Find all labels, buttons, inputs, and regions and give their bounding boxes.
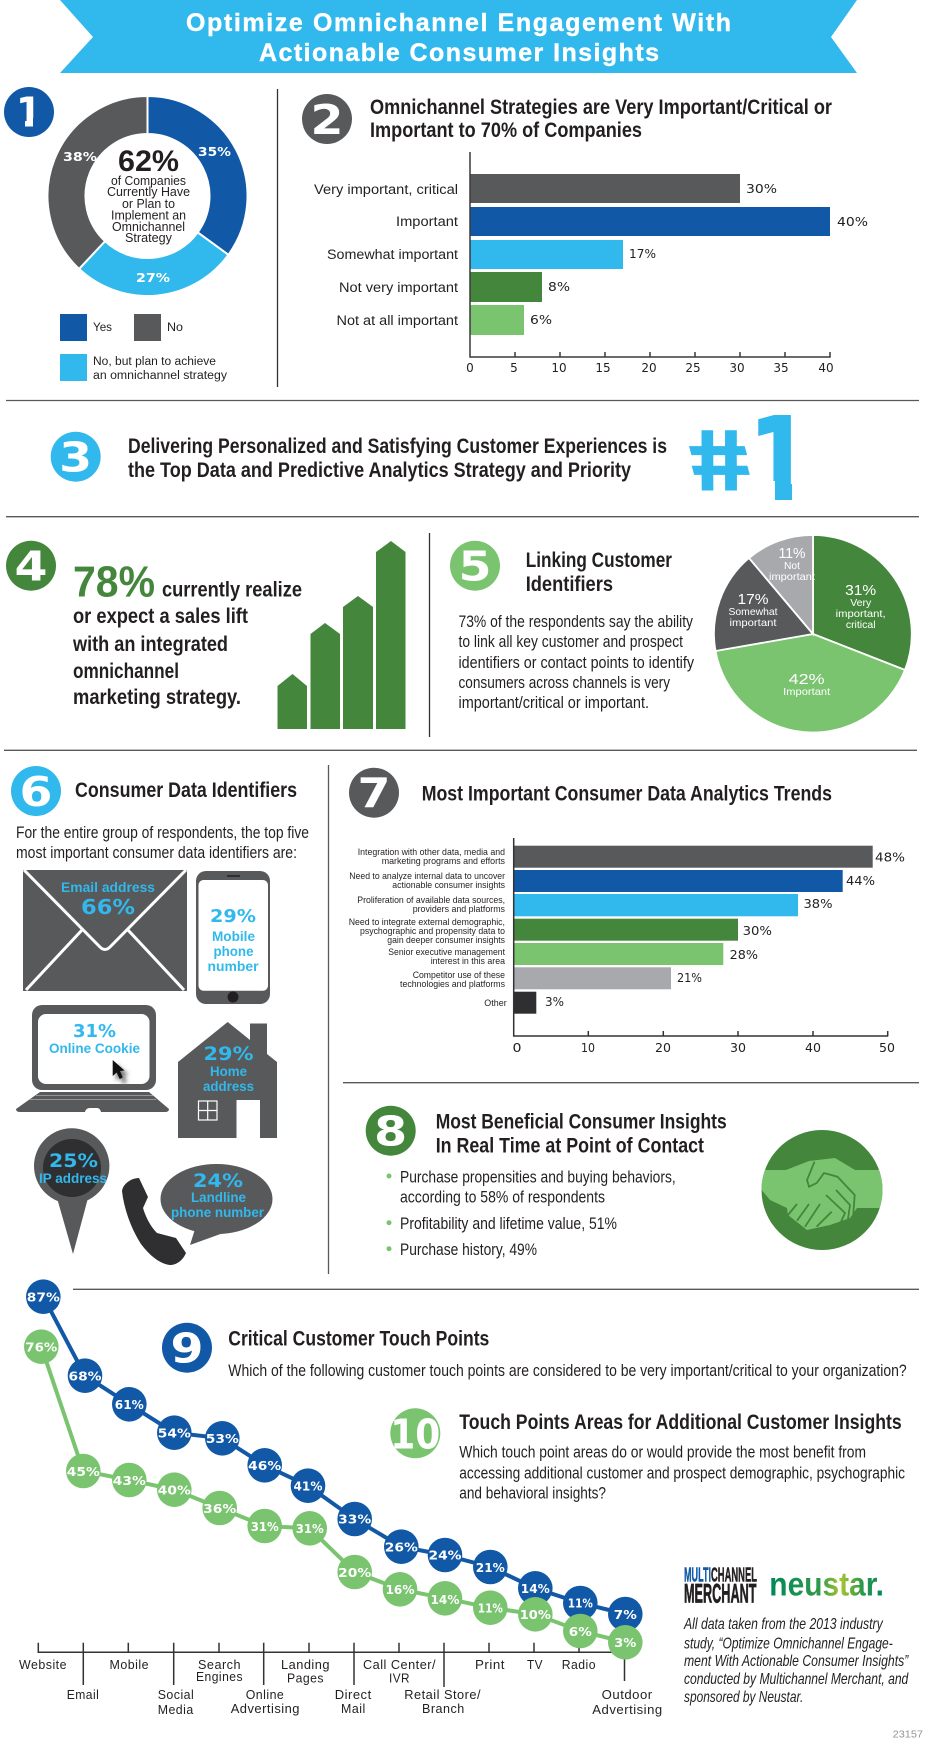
icon: smartphone mobile phone number: Mobile	[212, 929, 255, 944]
pie chart	[714, 535, 912, 733]
category labels: Important	[396, 214, 458, 229]
axis numbers: 10	[581, 1041, 595, 1055]
line chart: very important touch points (blue)	[26, 1279, 643, 1631]
icon: map pin ip address	[34, 1128, 109, 1254]
number badge 5: 5	[458, 542, 492, 590]
heading 6: Consumer Data Identifiers	[75, 778, 297, 802]
value labels: 17%	[629, 247, 656, 261]
value labels: 38%	[804, 897, 832, 911]
icon: laptop online cookie: Online Cookie	[49, 1041, 140, 1056]
category labels: Need to integrate external demographic,	[349, 917, 505, 928]
icon: house home address: Home	[210, 1064, 247, 1079]
category labels: actionable consumer insights	[392, 880, 505, 891]
body text 5: important/critical or important.	[458, 693, 649, 712]
line chart: very important touch points (blue): 54%	[158, 1426, 191, 1440]
number badge 7: 7	[358, 770, 390, 818]
icon: smartphone mobile phone number: 29%	[210, 907, 256, 927]
number badge 4	[6, 541, 56, 591]
number badge 1	[4, 87, 54, 137]
category labels: Competitor use of these	[413, 970, 505, 981]
value labels: 30%	[746, 182, 777, 196]
category labels	[349, 847, 507, 1009]
touch point category labels: TV	[527, 1657, 543, 1672]
logo: Multichannel Merchant	[684, 1565, 757, 1608]
heading 5: Identifiers	[526, 572, 613, 596]
line chart: additional insights touch points (green)	[24, 1329, 643, 1660]
icon: laptop online cookie: 31%	[73, 1021, 116, 1042]
axis numbers: 5	[510, 361, 518, 375]
donut centre text: Strategy	[125, 230, 172, 245]
category labels: technologies and platforms	[400, 979, 505, 990]
heading 5: Linking Customer	[526, 548, 673, 572]
donut legend: an omnichannel strategy	[93, 370, 227, 382]
value labels: 21%	[677, 971, 702, 985]
number badge 1: 1	[16, 88, 42, 136]
category labels: marketing programs and efforts	[382, 856, 505, 867]
title banner	[60, 0, 857, 73]
touch point category labels: Retail Store/	[404, 1687, 481, 1702]
axis numbers: 35	[773, 361, 789, 375]
heading 7: Most Important Consumer Data Analytics Trends	[422, 782, 832, 806]
body text 6	[16, 823, 309, 862]
pie labels: 42%	[789, 671, 825, 688]
touch point category labels: Outdoor	[602, 1687, 653, 1702]
panel 4: sales lift	[6, 541, 406, 729]
icon: house home address: 29%	[204, 1043, 254, 1065]
source note: All data taken from the 2013 industry	[683, 1616, 883, 1633]
donut centre text: Implement an	[111, 208, 186, 222]
bullet list: Purchase propensities and buying behaviors,	[400, 1167, 676, 1186]
line chart: additional insights touch points (green): 14%	[430, 1592, 460, 1607]
body text 6: most important consumer data identifiers are:	[16, 843, 297, 862]
icon: speech bubble landline	[160, 1164, 272, 1245]
category labels: Not very important	[339, 280, 458, 295]
icon: speech bubble landline: 24%	[193, 1170, 243, 1192]
heading 8	[436, 1109, 727, 1158]
line chart: additional insights touch points (green): 31%	[296, 1521, 324, 1536]
icon: envelope email address	[23, 870, 187, 991]
category labels: Proliferation of available data sources,	[357, 895, 505, 906]
number badge 8: 8	[374, 1108, 407, 1156]
line chart: additional insights touch points (green): 31%	[251, 1519, 279, 1534]
bullet list: according to 58% of respondents	[400, 1187, 605, 1206]
big number one: 1	[749, 394, 811, 528]
touch point category labels: Website	[19, 1657, 67, 1672]
donut centre text: Omnichannel	[112, 219, 185, 234]
body text 5: 73% of the respondents say the ability	[458, 612, 693, 631]
heading 2	[370, 95, 833, 142]
donut centre text: or Plan to	[122, 196, 175, 211]
category labels: gain deeper consumer insights	[387, 935, 505, 946]
value labels	[530, 182, 868, 327]
big number one: #	[678, 414, 761, 508]
line chart: very important touch points (blue): 46%	[248, 1458, 282, 1473]
donut legend: No	[167, 322, 183, 334]
body text 5: identifiers or contact points to identify	[458, 653, 694, 672]
panel 8: beneficial consumer insights	[366, 1106, 884, 1259]
value labels: 30%	[743, 924, 772, 938]
panel 10: additional insights heading	[390, 1408, 905, 1502]
panel 6: consumer data identifiers	[11, 766, 309, 1265]
body text 6: For the entire group of respondents, the top five	[16, 823, 309, 842]
line chart: additional insights touch points (green): 40%	[158, 1482, 191, 1498]
donut value labels: 35%	[198, 144, 232, 159]
line chart: very important touch points (blue): 14%	[521, 1581, 550, 1596]
icon: smartphone mobile phone number: phone	[214, 944, 254, 959]
category labels: Other	[484, 998, 507, 1009]
touch point category labels: Advertising	[592, 1702, 663, 1717]
sales lift statement: omnichannel	[73, 659, 179, 683]
icon: speech bubble landline: phone number	[171, 1205, 265, 1220]
donut value labels: 38%	[63, 149, 98, 164]
icon: smartphone mobile phone number	[196, 871, 270, 1004]
pie labels: important	[730, 617, 777, 629]
bullet list	[386, 1167, 676, 1259]
axes	[470, 152, 831, 357]
axis numbers: 0	[512, 1041, 522, 1055]
touch point category labels: IVR	[389, 1671, 410, 1686]
value labels: 48%	[875, 851, 905, 865]
line chart: additional insights touch points (green): 16%	[386, 1582, 415, 1597]
axis numbers: 25	[685, 361, 701, 375]
number badge 8	[366, 1106, 416, 1156]
category labels: Not at all important	[336, 313, 458, 328]
line chart: additional insights touch points (green): 20%	[338, 1565, 372, 1580]
bars	[470, 174, 830, 335]
axis numbers: 20	[655, 1041, 671, 1055]
touch point category labels: Media	[158, 1702, 194, 1717]
icon: rising arrow bars	[278, 541, 406, 729]
sales lift statement: with an integrated	[72, 632, 228, 656]
touch point category labels	[19, 1657, 663, 1717]
touch point category labels: Call Center/	[363, 1657, 436, 1672]
line chart: additional insights touch points (green): 45%	[67, 1464, 100, 1479]
icon: map pin ip address: IP address	[39, 1171, 107, 1186]
category labels: providers and platforms	[413, 904, 505, 915]
bars	[514, 846, 873, 1014]
value labels: 28%	[730, 948, 758, 962]
icon: handshake	[760, 1130, 884, 1250]
sales lift statement: or expect a sales lift	[73, 604, 248, 628]
axes	[514, 838, 888, 1036]
heading 3	[128, 434, 667, 482]
axis numbers: 15	[595, 361, 611, 375]
category labels	[314, 182, 458, 328]
panel 7: analytics trends bar chart	[349, 768, 905, 1055]
body text 5	[458, 612, 694, 712]
source note: sponsored by Neustar.	[684, 1689, 803, 1706]
body text 5: to link all key customer and prospect	[458, 632, 683, 651]
bullet list: Profitability and lifetime value, 51%	[400, 1214, 617, 1233]
panel 1: omnichannel strategy donut	[4, 87, 248, 382]
icon: smartphone mobile phone number: number	[208, 959, 259, 974]
line chart: additional insights touch points (green): 36%	[203, 1501, 237, 1516]
donut centre text: Currently Have	[107, 184, 190, 199]
icon: house home address	[178, 1022, 277, 1138]
number badge 7	[349, 768, 399, 818]
category labels: Very important, critical	[314, 182, 458, 197]
axis numbers: 40	[818, 361, 834, 375]
touch point category labels: Landing	[281, 1657, 330, 1672]
bullet list: Purchase history, 49%	[400, 1240, 537, 1259]
donut centre text: of Companies	[111, 173, 186, 188]
line chart: additional insights touch points (green): 10%	[520, 1607, 551, 1622]
number badge 9	[162, 1323, 212, 1373]
heading 8: In Real Time at Point of Contact	[436, 1134, 704, 1158]
panel 3: top priority	[50, 415, 792, 500]
pie labels: Not	[784, 560, 800, 572]
source note	[683, 1616, 909, 1706]
axis numbers	[512, 1041, 895, 1055]
pie labels: 31%	[845, 582, 876, 599]
icon: house home address: address	[203, 1079, 254, 1094]
touch point category labels: Direct	[335, 1687, 372, 1702]
sales lift statement	[72, 558, 302, 709]
axis numbers: 30	[730, 1041, 746, 1055]
line chart: very important touch points (blue): 68%	[68, 1368, 102, 1384]
question 10	[459, 1442, 905, 1502]
icon: map pin ip address: 25%	[49, 1150, 98, 1172]
icon: telephone handset	[122, 1178, 186, 1265]
number badge 9: 9	[170, 1324, 204, 1372]
pie labels: Important	[783, 686, 830, 698]
line chart: very important touch points (blue): 87%	[27, 1290, 60, 1304]
donut legend	[60, 314, 227, 382]
axis numbers	[466, 361, 834, 375]
donut centre text: 62%	[118, 145, 179, 178]
heading 3: the Top Data and Predictive Analytics Strategy and Priority	[128, 458, 631, 482]
donut chart	[48, 96, 248, 296]
pie labels: 17%	[738, 591, 768, 608]
title banner: Actionable Consumer Insights	[259, 39, 659, 67]
number badge 3: 3	[59, 434, 92, 482]
value labels: 44%	[846, 874, 875, 888]
number badge 4: 4	[14, 542, 48, 590]
value labels: 6%	[530, 313, 552, 327]
big number one	[689, 415, 792, 500]
line chart: additional insights touch points (green): 6%	[569, 1624, 592, 1639]
category labels: Integration with other data, media and	[358, 847, 505, 858]
heading 5	[526, 548, 673, 596]
axis numbers: 0	[466, 361, 474, 375]
touch point category labels: Pages	[287, 1671, 324, 1686]
sales lift statement: currently realize	[162, 578, 302, 602]
panel 5: linking identifiers	[450, 535, 912, 733]
value labels: 8%	[548, 280, 570, 294]
pie labels: important	[769, 571, 815, 583]
panel 9: customer touch points heading	[162, 1323, 907, 1380]
logo: Neustar: neustar.	[769, 1565, 884, 1602]
touch point category labels: Print	[475, 1657, 505, 1672]
value labels	[545, 851, 905, 1009]
number badge 6: 6	[20, 768, 52, 816]
axis numbers: 20	[641, 361, 657, 375]
heading 8: Most Beneficial Consumer Insights	[436, 1109, 727, 1133]
category labels: Need to analyze internal data to uncover	[349, 871, 505, 882]
number badge 5	[450, 541, 500, 591]
line chart: very important touch points (blue): 61%	[115, 1397, 144, 1412]
category labels: interest in this area	[431, 956, 506, 967]
sales lift statement: 78%	[73, 558, 155, 607]
pie labels: critical	[846, 619, 876, 631]
line chart: additional insights touch points (green): 11%	[478, 1600, 503, 1616]
icon: laptop online cookie	[16, 1005, 169, 1112]
axis numbers: 10	[551, 361, 567, 375]
touch point category labels: Social	[158, 1687, 194, 1702]
heading 3: Delivering Personalized and Satisfying Customer Experiences is	[128, 434, 667, 458]
pie labels: Somewhat	[728, 606, 778, 618]
logo: Multichannel Merchant: MULTI	[684, 1565, 711, 1587]
heading 2: Important to 70% of Companies	[370, 118, 642, 142]
touch point category labels: Radio	[562, 1657, 596, 1672]
value labels: 3%	[545, 995, 564, 1009]
icon: envelope email address: Email address	[61, 880, 155, 895]
axis numbers: 40	[805, 1041, 821, 1055]
value labels: 40%	[837, 215, 868, 229]
heading 9: Critical Customer Touch Points	[228, 1327, 489, 1351]
touch points axis	[38, 1643, 625, 1687]
heading 2: Omnichannel Strategies are Very Important/Critical or	[370, 95, 833, 119]
number badge 10: 10	[390, 1410, 440, 1458]
number badge 6	[11, 766, 61, 816]
category labels: psychographic and propensity data to	[360, 926, 505, 937]
donut legend: Yes	[93, 322, 112, 334]
line chart: additional insights touch points (green): 43%	[113, 1473, 146, 1488]
touch point category labels: Email	[67, 1687, 99, 1702]
line chart: very important touch points (blue): 21%	[476, 1560, 505, 1575]
touch point category labels: Engines	[196, 1669, 243, 1684]
touch point category labels: Mobile	[110, 1657, 149, 1672]
axis numbers: 50	[879, 1041, 895, 1055]
body text 5: consumers across channels is very	[458, 673, 670, 692]
line chart: very important touch points (blue): 26%	[385, 1540, 418, 1554]
donut value labels	[63, 144, 232, 285]
touch point category labels: Advertising	[231, 1701, 300, 1716]
pie labels: Very	[850, 597, 872, 609]
line chart: very important touch points (blue): 7%	[614, 1607, 637, 1622]
sales lift statement: marketing strategy.	[73, 685, 241, 709]
touch point category labels: Branch	[422, 1701, 465, 1716]
pie labels: 11%	[778, 545, 806, 562]
line chart: additional insights touch points (green): 3%	[614, 1635, 637, 1650]
icon: speech bubble landline: Landline	[191, 1190, 246, 1205]
touch point category labels: Mail	[341, 1701, 366, 1716]
number badge 2	[302, 94, 352, 144]
donut legend: No, but plan to achieve	[93, 356, 216, 368]
pie labels	[728, 545, 886, 698]
touch point category labels: Online	[246, 1687, 284, 1702]
number badge 2: 2	[310, 96, 344, 144]
icon: envelope email address: 66%	[81, 895, 135, 919]
pie labels: important,	[836, 608, 886, 620]
axis numbers: 30	[729, 361, 745, 375]
title banner: Optimize Omnichannel Engagement With	[186, 9, 731, 37]
line chart: very important touch points (blue): 41%	[294, 1478, 323, 1494]
job number: 23157	[893, 1729, 923, 1741]
line chart: very important touch points (blue): 33%	[338, 1512, 372, 1526]
line chart: very important touch points (blue): 11%	[568, 1596, 593, 1610]
text: CHANNEL	[711, 1565, 757, 1587]
line chart: very important touch points (blue): 24%	[428, 1548, 462, 1563]
donut centre text	[107, 145, 190, 245]
line chart: very important touch points (blue): 53%	[206, 1431, 239, 1446]
panel 2: importance bar chart	[302, 94, 868, 375]
line chart: additional insights touch points (green): 76%	[25, 1340, 58, 1354]
touch point category labels: Search	[198, 1657, 241, 1672]
category labels: Somewhat important	[327, 247, 458, 262]
number badge 3	[51, 432, 101, 482]
question 10: and behavioral insights?	[459, 1483, 606, 1502]
donut value labels: 27%	[136, 270, 171, 285]
text: MERCHANT	[684, 1578, 757, 1608]
category labels: Senior executive management	[388, 947, 505, 958]
